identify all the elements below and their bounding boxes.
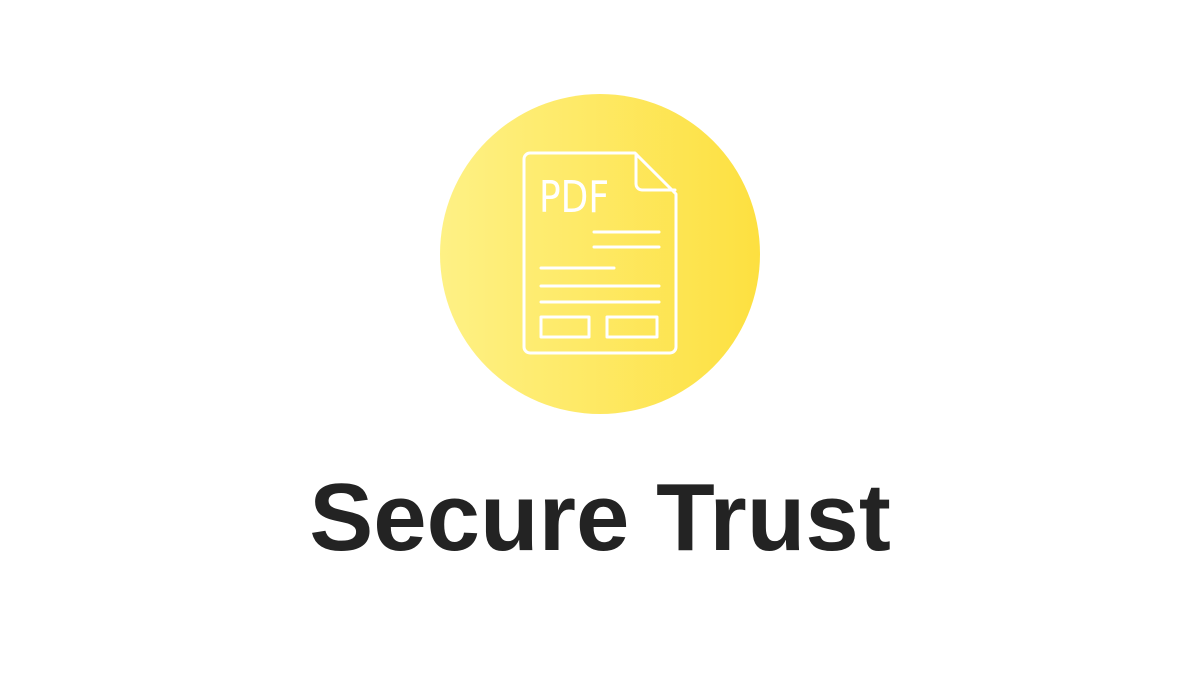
circle background xyxy=(440,94,760,414)
icon: yellow circle with PDF document xyxy=(440,94,760,414)
document outline xyxy=(524,153,676,353)
title: Secure Trust xyxy=(309,464,891,571)
PDF label: PDF xyxy=(539,172,609,223)
